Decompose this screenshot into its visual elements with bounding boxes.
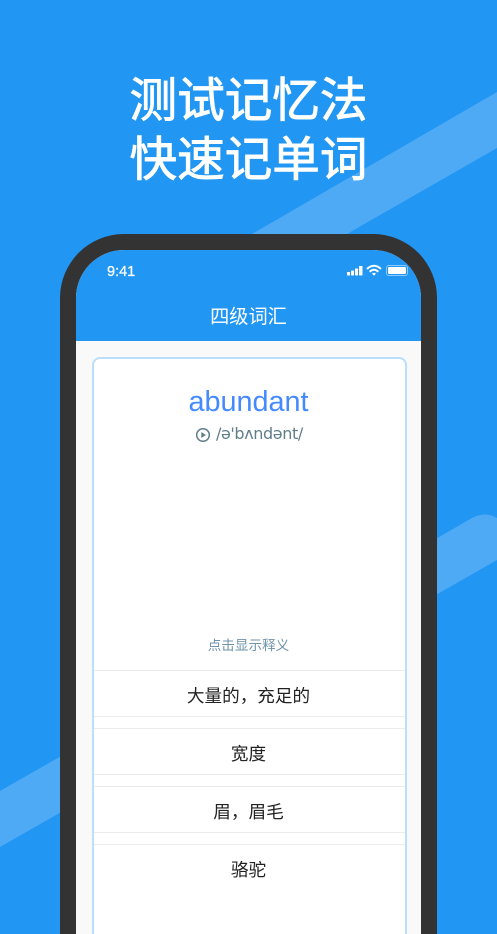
option 4: 骆驼 [231, 860, 266, 880]
hint text: 点击显示释义 [208, 638, 289, 653]
word: abundant [188, 386, 309, 418]
header title: 四级词汇 [210, 307, 287, 328]
phonetic with play icon [196, 424, 304, 443]
app header [76, 250, 421, 341]
word card [92, 357, 407, 934]
title [130, 75, 367, 187]
title: 测试记忆法 [130, 75, 367, 128]
option 1: 大量的，充足的 [187, 686, 310, 706]
phone mockup [60, 234, 437, 934]
title: 快速记单词 [130, 134, 367, 187]
option 2: 宽度 [231, 744, 266, 764]
option 3: 眉，眉毛 [213, 802, 284, 822]
phone screen [76, 250, 421, 934]
status bar time: 9:41 [107, 264, 135, 280]
icon: play [196, 428, 210, 442]
status icons [347, 264, 408, 276]
phonetic text: /ə'bʌndənt/ [216, 424, 303, 443]
